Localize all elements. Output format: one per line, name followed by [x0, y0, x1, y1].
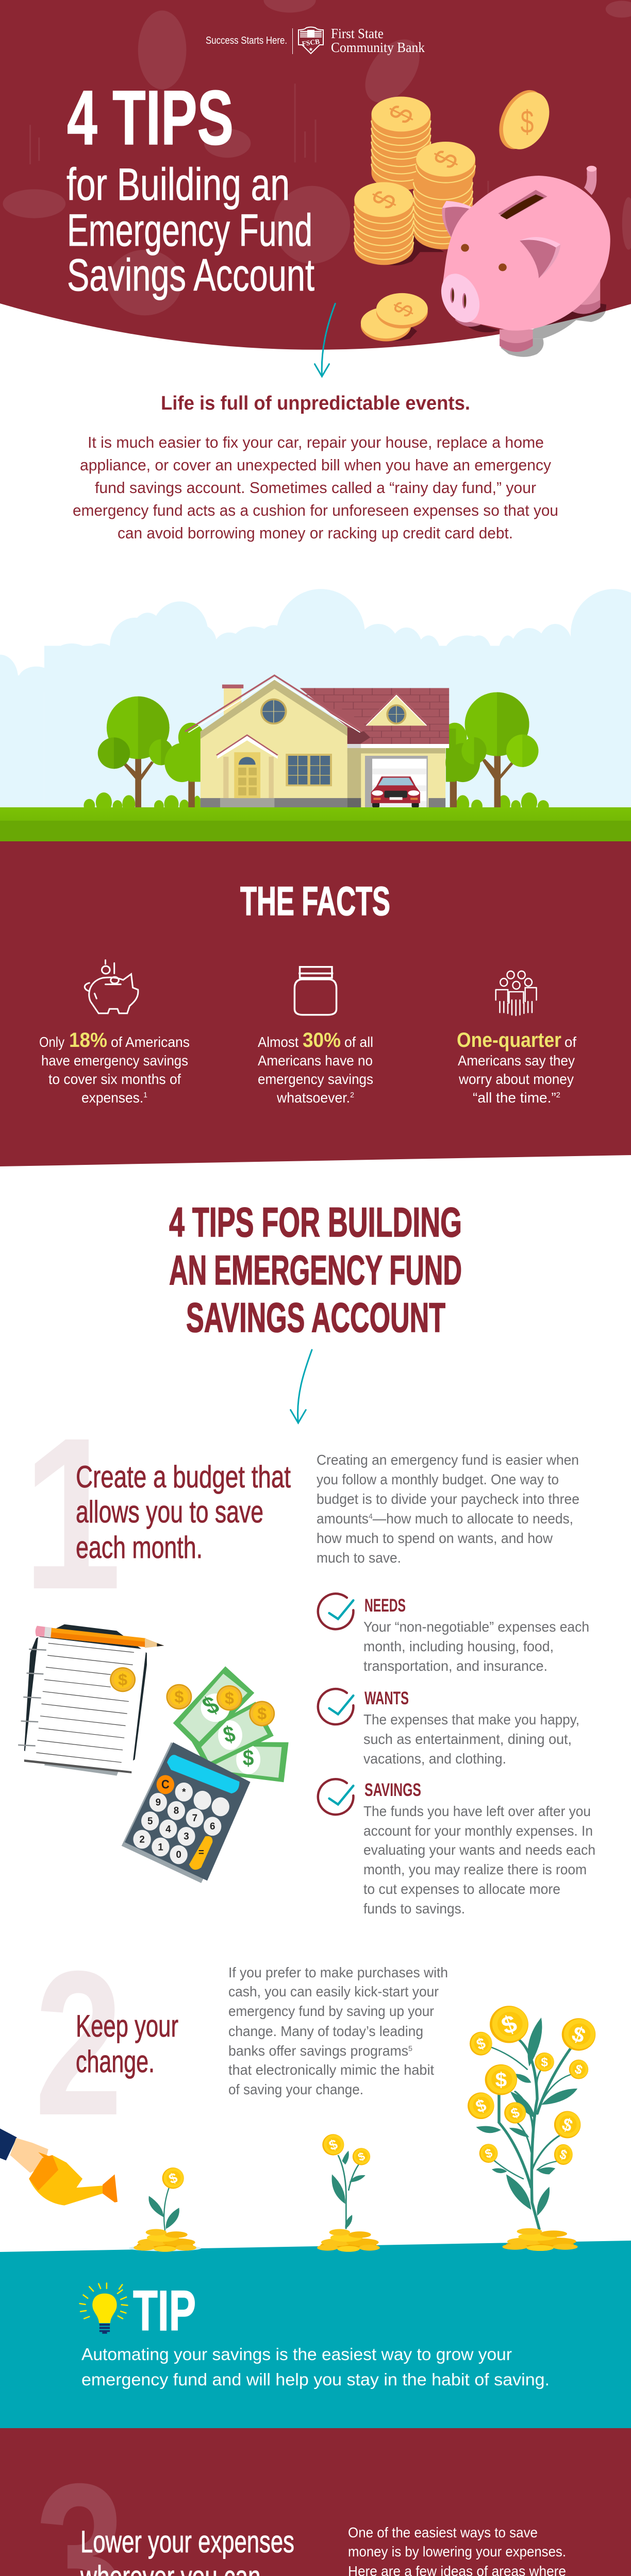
text block: fact 2: Almost	[258, 1034, 298, 1050]
heading: 4 tips	[169, 1199, 462, 1341]
panel: tip 3	[0, 2428, 631, 2576]
icon: check wants	[318, 1689, 353, 1724]
text block: tip: Automating your savings is the easiest way to grow your	[81, 2345, 512, 2364]
pig body	[434, 166, 610, 352]
text block: fact 3	[457, 1029, 576, 1106]
icon: light bulb	[80, 2283, 127, 2334]
illustration: large money plant: $	[509, 2104, 522, 2122]
text block: tip 3 intro	[348, 2524, 566, 2576]
text block: fact 2: 30%	[303, 1029, 341, 1052]
text block: fact 2: Americans have no	[258, 1053, 373, 1069]
illustration: large money plant	[468, 2006, 595, 2251]
text block: fact 1: of Americans	[111, 1034, 190, 1050]
text block: savings: account for your monthly expenses. In	[363, 1823, 593, 1839]
illustration: calculator: *	[182, 1787, 186, 1798]
heading: 4 tips: SAVINGS ACCOUNT	[186, 1295, 445, 1341]
number: 1: 1	[23, 1393, 122, 1635]
text block: tip: emergency fund and will help you stay in the habit of saving.	[81, 2370, 550, 2389]
illustration: large money plant: $	[484, 2146, 494, 2161]
text block: needs: Your “non-negotiable” expenses each	[363, 1619, 589, 1635]
title	[67, 74, 314, 300]
text block: fact 1: 18%	[69, 1029, 107, 1052]
text block: savings: funds to savings.	[363, 1901, 465, 1917]
text block: savings: The funds you have left over after you	[363, 1803, 591, 1819]
icon: check savings	[318, 1779, 353, 1815]
text block: tip 1 intro	[317, 1452, 579, 1566]
illustration: cash and coins: $	[225, 1689, 234, 1707]
illustration: calculator: 3	[184, 1831, 189, 1842]
ground	[0, 807, 631, 841]
logo: header brand lockup: First State	[331, 26, 384, 41]
text block: tip 2: cash, you can easily kick-start your	[228, 1984, 439, 1999]
text block: intro paragraph	[73, 433, 558, 542]
icon: group of people	[496, 971, 537, 1015]
title: Emergency Fund	[67, 205, 312, 256]
text block: savings: to cut expenses to allocate more	[363, 1881, 560, 1897]
text block: fact 3: 2	[556, 1091, 560, 1099]
text block: tip 2: banks offer savings programs	[228, 2043, 418, 2059]
text block: fact 2	[258, 1029, 373, 1106]
text block: fact 2: whatsoever.	[277, 1090, 354, 1106]
text block: intro paragraph: appliance, or cover an unexpected bill when you have an emergency	[80, 456, 551, 474]
shadow: piggy bank on ground	[501, 304, 606, 357]
text block: needs	[363, 1596, 589, 1674]
illustration: hand with watering can	[0, 2128, 118, 2206]
text block: fact 1: 1	[143, 1091, 147, 1099]
illustration: large money plant: $	[473, 2096, 489, 2117]
heading: tip 1: each month.	[76, 1530, 203, 1565]
illustration: cash and coins: $	[174, 1688, 184, 1706]
illustration: large money plant: $	[541, 2056, 549, 2069]
text block: tip 1 intro: much to save.	[317, 1550, 401, 1566]
panel: the facts	[0, 841, 631, 1166]
text block: wants: WANTS	[364, 1688, 409, 1708]
illustration: calculator: 5	[147, 1816, 153, 1827]
illustration: cash and coins: $	[197, 1691, 224, 1719]
text block: needs: transportation, and insurance.	[363, 1658, 547, 1674]
illustration: calculator: 0	[176, 1850, 181, 1860]
text block: savings: SAVINGS	[364, 1780, 421, 1800]
icon: piggy bank outline	[85, 960, 138, 1013]
text block: fact 1: have emergency savings	[41, 1053, 188, 1069]
illustration: coin stacks	[354, 84, 558, 341]
heading: tip 1: allows you to save	[76, 1495, 263, 1529]
illustration: cash and coins: $	[243, 1745, 254, 1770]
text block: fact 1: Only	[39, 1034, 64, 1050]
illustration: coin stacks: $	[521, 104, 534, 140]
text block: tip 1 intro: budget is to divide your paycheck into three	[317, 1491, 579, 1507]
text block: savings: evaluating your wants and needs each	[363, 1842, 595, 1858]
illustration: large money plant: $	[569, 2021, 589, 2047]
illustration: large money plant: $	[495, 2069, 507, 2091]
text block: tip 2: 5	[408, 2044, 412, 2053]
heading: 4 tips: AN EMERGENCY FUND	[169, 1247, 462, 1294]
arrow: heading to tip 1	[291, 1350, 312, 1423]
illustration: small money plant: $	[167, 2170, 179, 2187]
illustration: calculator: 9	[156, 1797, 161, 1808]
text block: fact 2: of all	[344, 1034, 373, 1050]
panel: hero background	[0, 0, 631, 350]
text block: tip 1 intro: 4	[369, 1512, 373, 1521]
number: 2: 2	[35, 1928, 123, 2158]
text block: fact 3: “all the time.”	[473, 1090, 556, 1106]
heading: intro: Life is full of unpredictable events.	[161, 393, 470, 414]
text block: fact 3: of	[564, 1034, 576, 1050]
illustration: large money plant: $	[573, 2062, 584, 2078]
text block: wants: vacations, and clothing.	[363, 1751, 506, 1767]
illustration: calculator	[122, 1742, 251, 1883]
illustration: calculator: C	[161, 1777, 170, 1791]
text block: wants: such as entertainment, dining out,	[363, 1731, 572, 1747]
text block: fact 3: One-quarter	[457, 1029, 561, 1052]
illustration: coin stacks: $	[364, 185, 404, 214]
icon: check needs	[318, 1594, 353, 1629]
shadow: piggy bank on maroon	[468, 303, 606, 333]
text block: tip 1 intro: amounts	[317, 1511, 372, 1527]
text block: tip 3 intro: money is by lowering your expenses.	[348, 2544, 566, 2560]
illustration: notebook and pencil: $	[118, 1670, 127, 1689]
illustration: cash and coins: $	[221, 1721, 238, 1747]
logo: header brand lockup: Success Starts Here.	[206, 35, 287, 46]
illustration: coin stacks: $	[381, 100, 421, 128]
illustration: large money plant: $	[474, 2035, 488, 2054]
text block: tip	[81, 2345, 550, 2389]
illustration: calculator: 7	[192, 1813, 197, 1824]
panel: tip band	[0, 2241, 631, 2428]
illustration: calculator: 8	[174, 1805, 179, 1817]
text block: fact 2: emergency savings	[258, 1071, 373, 1087]
text block: needs: NEEDS	[364, 1596, 406, 1616]
illustration: cash and coins: $	[257, 1704, 267, 1723]
text block: intro paragraph: fund savings account. Sometimes called a “rainy day fund,” your	[95, 479, 536, 497]
illustration: large money plant: $	[498, 2010, 521, 2040]
logo: header brand lockup	[206, 26, 425, 55]
illustration: large money plant: $	[559, 2114, 575, 2136]
text block: fact 1: to cover six months of	[48, 1071, 181, 1087]
text block: tip 2: emergency fund by saving up your	[228, 2003, 434, 2019]
title: 4 TIPS	[67, 74, 234, 161]
heading: tip 2: change.	[76, 2044, 155, 2079]
heading: tip 3: Lower your expenses	[80, 2524, 294, 2559]
logo: header brand lockup: Community Bank	[331, 40, 425, 55]
heading: tip: TIP	[133, 2279, 196, 2343]
illustration: calculator: 6	[210, 1821, 215, 1832]
text block: savings: month, you may realize there is room	[363, 1861, 587, 1877]
text block: intro paragraph: It is much easier to fix your car, repair your house, replace a home	[88, 433, 544, 451]
text block: savings	[363, 1780, 595, 1917]
heading: tip 2: Keep your	[76, 2009, 178, 2043]
logo: header brand lockup: FSCB	[302, 38, 320, 47]
text block: tip 2	[228, 1964, 448, 2097]
illustration: large money plant: $	[558, 2147, 569, 2163]
text block: intro paragraph: can avoid borrowing money or racking up credit card debt.	[118, 524, 513, 542]
illustration: cash and coins	[166, 1666, 289, 1782]
decoration: faint falling coins in hero	[3, 0, 631, 315]
heading: tip 3	[80, 2524, 294, 2576]
illustration: piggy bank	[434, 166, 610, 357]
heading: tip 1	[76, 1460, 291, 1565]
text block: fact 2: 2	[350, 1091, 354, 1099]
illustration: calculator: =	[198, 1847, 204, 1858]
title: Savings Account	[67, 249, 314, 300]
illustration: house with trees and car	[84, 675, 549, 813]
text block: tip 2: of saving your change.	[228, 2081, 363, 2097]
text block: tip 1 intro: how much to spend on wants, and how	[317, 1530, 553, 1546]
illustration: small money plant	[129, 2167, 201, 2252]
icon: empty jar	[294, 967, 337, 1015]
illustration: medium money plant: $	[356, 2149, 367, 2164]
illustration: notebook and pencil	[18, 1624, 164, 1776]
text block: tip 3 intro: One of the easiest ways to save	[348, 2524, 538, 2540]
heading: 4 tips: 4 TIPS FOR BUILDING	[169, 1199, 462, 1246]
illustration: clouds	[0, 589, 631, 808]
illustration: calculator: 4	[165, 1824, 171, 1835]
title: for Building an	[67, 159, 290, 210]
illustration: medium money plant: $	[327, 2136, 340, 2154]
illustration: calculator: 2	[139, 1834, 145, 1845]
heading: tip 2	[76, 2009, 178, 2079]
text block: fact 3: worry about money	[458, 1071, 574, 1087]
illustration: coin stacks: $	[387, 298, 420, 321]
illustration: coin stacks: $	[426, 145, 465, 173]
heading: the facts: THE FACTS	[240, 878, 390, 924]
text block: fact 1: expenses.	[81, 1090, 147, 1106]
text block: fact 1	[39, 1029, 190, 1106]
text block: tip 2: that electronically mimic the habit	[228, 2062, 434, 2078]
text block: wants	[363, 1688, 579, 1767]
text block: tip 1 intro: —how much to allocate to needs,	[373, 1511, 573, 1527]
heading: tip 1: Create a budget that	[76, 1460, 291, 1494]
arrow: hero to intro	[314, 303, 335, 377]
text block: tip 1 intro: you follow a monthly budget. One way to	[317, 1471, 559, 1487]
text block: intro paragraph: emergency fund acts as a cushion for unforeseen expenses so that you	[73, 501, 558, 519]
text block: needs: month, including housing, food,	[363, 1638, 554, 1654]
illustration: medium money plant	[317, 2134, 380, 2252]
text block: tip 2: If you prefer to make purchases with	[228, 1964, 448, 1980]
logo: header brand lockup: ★	[309, 47, 313, 53]
illustration: calculator: 1	[158, 1842, 163, 1853]
text block: tip 2: change. Many of today’s leading	[228, 2023, 423, 2039]
text block: wants: The expenses that make you happy,	[363, 1711, 579, 1727]
text block: fact 3: Americans say they	[458, 1053, 575, 1069]
text block: tip 1 intro: Creating an emergency fund is easier when	[317, 1452, 579, 1468]
